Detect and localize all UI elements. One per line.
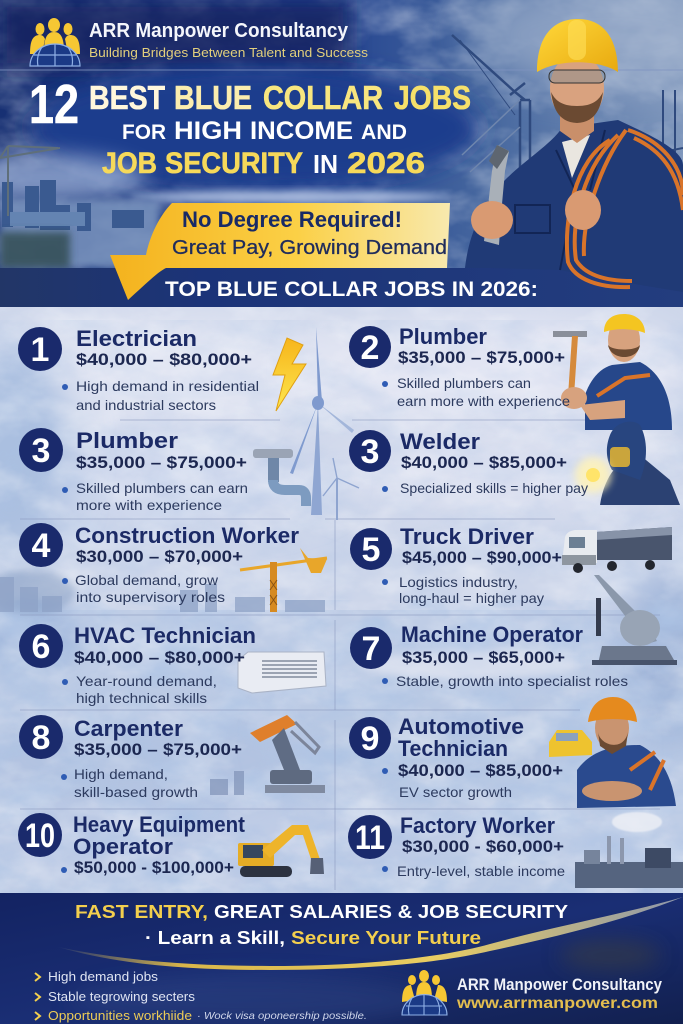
hands [471, 201, 513, 239]
number badge [349, 717, 391, 759]
title: INCOME [250, 117, 353, 145]
hammer [553, 331, 587, 337]
description: High demand in residential [76, 378, 259, 394]
job title: Machine Operator [401, 622, 583, 647]
number badge: 10 [25, 817, 55, 855]
description: Skilled plumbers can earn [76, 480, 248, 496]
company name: ARR Manpower Consultancy [89, 20, 349, 42]
job 8: carpenter [19, 715, 242, 800]
title: AND [361, 121, 407, 144]
salary: $35,000 – $75,000+ [398, 348, 565, 367]
salary: $30,000 – $70,000+ [76, 547, 243, 566]
company logo [30, 18, 80, 66]
job title: Electrician [76, 326, 197, 351]
salary: $45,000 – $90,000+ [402, 548, 562, 567]
salary: $40,000 – $80,000+ [76, 350, 252, 369]
job title: Factory Worker [400, 813, 555, 838]
illustration: machine arm [592, 575, 677, 665]
number badge [19, 624, 63, 668]
job title: Automotive [398, 714, 524, 739]
ribbon text: No Degree Required! [182, 207, 402, 232]
title: IN [313, 149, 338, 179]
footer bullet list: High demand jobs [48, 970, 158, 984]
title: 2026 [347, 147, 425, 180]
footer headline: · Learn a Skill, [145, 928, 285, 948]
job title [398, 714, 524, 761]
salary: $40,000 – $85,000+ [398, 761, 563, 780]
illustration: air conditioner [238, 652, 326, 693]
job 11: factory worker [348, 813, 565, 879]
description: Stable, growth into specialist roles [396, 673, 628, 689]
illustration: wind turbines [290, 327, 359, 520]
footer bullet list: · Wock visa oponeership possible. [197, 1010, 367, 1022]
header background [0, 0, 683, 268]
wrench [484, 145, 509, 245]
footer swoosh [58, 897, 683, 970]
description: skill-based growth [74, 784, 198, 800]
illustration: main worker [465, 19, 683, 292]
shirt [562, 135, 590, 178]
footer logo [402, 970, 447, 1015]
safety glasses [549, 70, 605, 83]
number badge: 5 [362, 531, 380, 569]
job 1: electrician [18, 326, 259, 413]
icon: globe [30, 44, 80, 66]
job 5: truck driver [350, 524, 562, 606]
footer bullet list: Stable tegrowing secters [48, 990, 195, 1004]
illustration: crane [0, 548, 327, 612]
job title: Plumber [76, 428, 178, 453]
title: BLUE [174, 79, 252, 116]
hard hat [537, 19, 618, 72]
number badge: 8 [32, 719, 50, 757]
description: Skilled plumbers can [397, 375, 531, 391]
number badge [349, 430, 391, 472]
salary: $35,000 – $75,000+ [76, 453, 247, 472]
salary: $35,000 – $65,000+ [402, 648, 565, 667]
title: HIGH [174, 117, 242, 145]
description [62, 480, 248, 513]
salary: $30,000 - $60,000+ [402, 837, 564, 856]
illustration: factory [575, 812, 683, 888]
description [62, 572, 225, 605]
car [549, 730, 592, 757]
illustration: welder [575, 422, 680, 505]
description: long-haul = higher pay [399, 590, 544, 606]
ribbon arrow [110, 203, 450, 300]
job 3: welder [349, 429, 588, 496]
footer headline: Secure Your Future [291, 928, 481, 948]
city skyline and crane [0, 146, 160, 268]
footer bullet list: Opportunities workhiide [48, 1009, 192, 1023]
job title: Construction Worker [75, 523, 299, 548]
ribbon text [172, 207, 447, 259]
description: into supervisory roles [76, 589, 225, 605]
ribbon text: Great Pay, Growing Demand [172, 237, 447, 259]
job title: Heavy Equipment [73, 812, 246, 837]
description [62, 378, 259, 413]
number badge [18, 327, 62, 371]
number badge: 3 [361, 433, 379, 471]
title [29, 73, 471, 180]
title: COLLAR [263, 79, 383, 116]
jacket [465, 120, 683, 292]
description: Specialized skills = higher pay [400, 480, 588, 496]
cable coil [567, 130, 683, 287]
footer headline: FAST ENTRY, [75, 901, 208, 922]
icon: lightning bolt [273, 338, 306, 411]
tagline: Building Bridges Between Talent and Success [89, 45, 369, 60]
number badge [19, 523, 63, 567]
icon: pipe [253, 449, 306, 506]
description: High demand, [74, 766, 168, 782]
job title: Welder [400, 429, 480, 454]
job title: Operator [73, 834, 173, 859]
number badge: 11 [355, 819, 385, 857]
description: Global demand, grow [75, 572, 219, 588]
salary: $50,000 - $100,000+ [74, 858, 234, 877]
description: Year-round demand, [76, 673, 217, 689]
row dividers [20, 420, 660, 809]
title: FOR [122, 121, 166, 144]
job title: Plumber [399, 324, 487, 349]
list panel background [0, 307, 683, 893]
number badge [19, 715, 63, 759]
title: BEST [89, 79, 165, 116]
title: JOBS [394, 79, 471, 116]
section heading: TOP BLUE COLLAR JOBS IN 2026: [165, 278, 538, 301]
job 9: automotive technician [349, 714, 563, 800]
title: 12 [29, 73, 79, 135]
description: Entry-level, stable income [397, 863, 565, 879]
description: earn more with experience [397, 393, 570, 409]
neck and head [560, 105, 594, 143]
description: high technical skills [76, 690, 207, 706]
job title [73, 812, 246, 859]
footer company name: ARR Manpower Consultancy [457, 976, 663, 994]
job 4: construction worker [19, 523, 299, 605]
number badge: 2 [361, 329, 379, 367]
job 6: hvac technician [19, 623, 256, 706]
job title: Truck Driver [400, 524, 534, 549]
illustration: automotive worker and car [549, 697, 676, 808]
footer website: www.arrmanpower.com [456, 995, 658, 1012]
salary: $35,000 – $75,000+ [74, 740, 242, 759]
footer headline [75, 901, 569, 948]
job 10: heavy equipment operator [18, 812, 246, 877]
title: SECURITY [165, 147, 303, 180]
icon: people [30, 18, 80, 54]
number badge [350, 528, 392, 570]
job 3: plumber [19, 428, 248, 513]
job 7: machine operator [350, 622, 628, 689]
description [61, 766, 198, 800]
number badge [19, 428, 63, 472]
footer panel [0, 893, 683, 1024]
job title: HVAC Technician [74, 623, 256, 648]
illustration: truck [562, 527, 672, 573]
number badge [349, 326, 391, 368]
number badge: 3 [32, 432, 50, 470]
description: Logistics industry, [399, 574, 518, 590]
band: section heading background [0, 268, 683, 307]
description: and industrial sectors [76, 397, 216, 413]
salary: $40,000 – $80,000+ [74, 648, 245, 667]
number badge: 1 [31, 331, 49, 369]
illustration: robotic arm [210, 715, 325, 795]
footer headline: GREAT SALARIES & JOB SECURITY [214, 901, 569, 922]
description: EV sector growth [399, 784, 512, 800]
illustration: excavator [238, 825, 324, 877]
salary: $40,000 – $85,000+ [401, 453, 567, 472]
description [382, 574, 544, 606]
description [382, 375, 570, 409]
footer bullet list [35, 970, 367, 1023]
number badge: 6 [32, 628, 50, 666]
illustration: plumber worker [553, 314, 672, 430]
description [62, 673, 217, 706]
title: JOB [102, 147, 157, 180]
number badge: 9 [361, 720, 379, 758]
job title: Carpenter [74, 716, 183, 741]
number badge: 7 [362, 630, 380, 668]
job 2: plumber [349, 324, 570, 409]
cranes behind worker [452, 35, 683, 185]
description: more with experience [76, 497, 222, 513]
number badge [350, 627, 392, 669]
number badge: 4 [32, 527, 51, 565]
job title: Technician [398, 736, 508, 761]
